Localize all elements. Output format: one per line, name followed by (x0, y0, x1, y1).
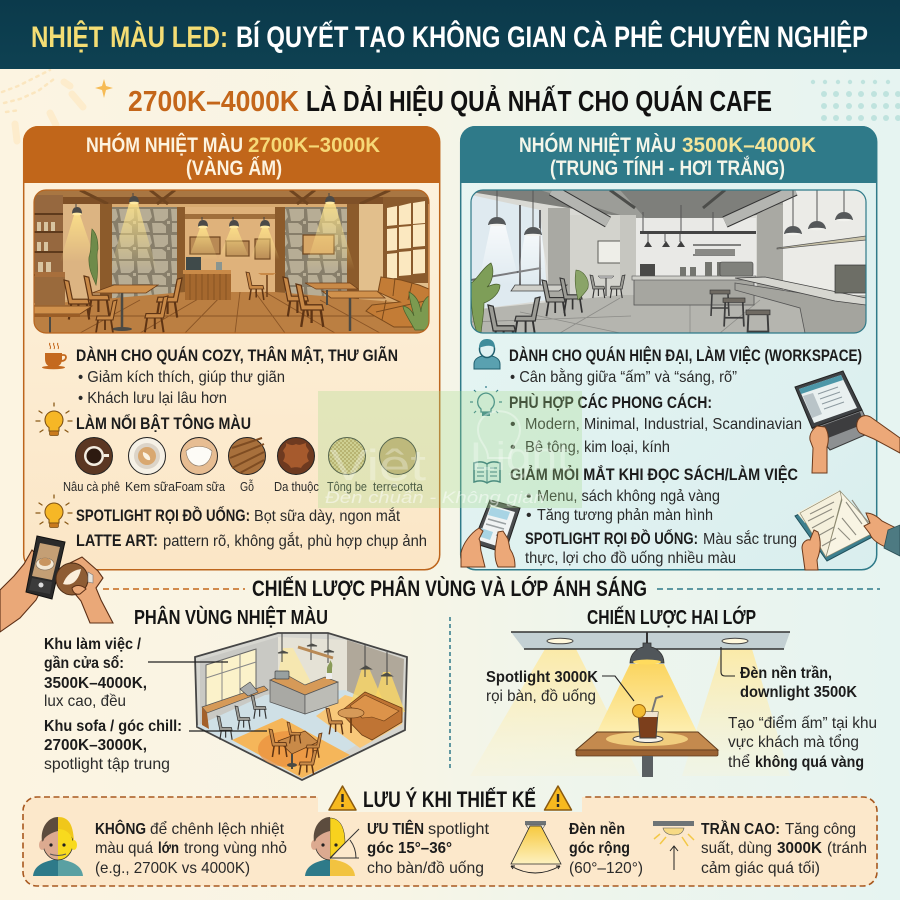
icon: light bulb (36, 495, 72, 528)
swatch: terracotta (380, 438, 416, 474)
block: spotlight and latte art: pattern rõ, không gắt, phù hợp chụp ảnh (163, 531, 427, 550)
icon: open book (474, 462, 500, 483)
text: warm point note: Tạo “điểm ấm” tại khu (728, 714, 877, 732)
block: reading and working: GIẢM MỎI MẮT KHI ĐỌC SÁCH/LÀM VIỆC (510, 465, 798, 484)
block: styles: • (510, 416, 516, 433)
text: sofa zone: spotlight tập trung (44, 756, 170, 773)
watermark: brand overlay: Việt (330, 441, 426, 490)
section heading: CHIẾN LƯỢC PHÂN VÙNG VÀ LỚP ÁNH SÁNG (252, 576, 647, 601)
main heading: 2700K–4000K (128, 86, 299, 118)
main heading: LÀ DẢI HIỆU QUẢ NHẤT CHO QUÁN CAFE (306, 84, 772, 118)
text: downlight: downlight 3500K (740, 684, 857, 701)
illustration: hands holding open book (795, 491, 900, 570)
block: color tones: LÀM NỔI BẬT TÔNG MÀU (76, 414, 251, 433)
text: no large difference: để chênh lệch nhiệt (150, 820, 285, 838)
illustration: isometric room (195, 633, 407, 780)
text: high ceiling: TRẦN CAO: (701, 819, 780, 838)
subheading: two layers: CHIẾN LƯỢC HAI LỚP (587, 605, 756, 629)
text: warm point note: thể (728, 753, 750, 771)
panel header neutral: (TRUNG TÍNH - HƠI TRẮNG) (550, 156, 785, 180)
text: high ceiling: suất, dùng (701, 840, 772, 857)
panel header warm (23, 126, 440, 183)
panel header neutral: 3500K–4000K (682, 134, 816, 157)
block: spotlight and latte art (36, 495, 427, 550)
text: wide angle light: Đèn nền (569, 821, 625, 838)
decoration: warm light rays top left (2, 70, 113, 141)
block: spotlight and latte art: SPOTLIGHT RỌI ĐỒ UỐNG: (76, 505, 250, 525)
block: spotlight and latte art: Bọt sữa dày, ngon mắt (254, 506, 400, 525)
text: no large difference (95, 819, 287, 877)
title banner (0, 0, 900, 69)
text: prefer spotlight: ƯU TIÊN (367, 819, 424, 838)
block: styles: • (510, 439, 516, 456)
panel header warm: 2700K–3000K (248, 134, 380, 157)
block: styles: Bê tông, kim loại, kính (525, 439, 670, 456)
text: spotlight: rọi bàn, đồ uống (486, 688, 596, 705)
text: sofa zone: Khu sofa / góc chill: (44, 718, 182, 735)
block: styles: Modern, Minimal, Industrial, Scandinavian (525, 416, 802, 433)
swatch labels: terrecotta (373, 479, 424, 494)
swatch: wood (228, 438, 266, 474)
block: reading and working: Menu, sách không ngả vàng (537, 488, 720, 505)
watermark: brand overlay (318, 391, 582, 508)
main heading (128, 84, 772, 118)
text: prefer spotlight: spotlight (428, 821, 490, 838)
text: work zone: gần cửa sổ: (44, 654, 124, 672)
watermark: brand overlay: Đèn chuẩn - Không gian (325, 488, 545, 507)
block: reading and working: Tăng tương phản màn hình (537, 507, 713, 524)
icon: warning right (544, 786, 572, 810)
illustration: cozy warm cafe interior (34, 190, 429, 333)
block: reading and working: • (526, 488, 532, 505)
left hand and arm (0, 550, 39, 632)
block: cozy cafe use: • Giảm kích thích, giúp thư giãn (78, 369, 285, 386)
panel: neutral 3500K-4000K (460, 126, 877, 570)
watermark: brand overlay: Light (470, 435, 570, 479)
text: spotlight (486, 669, 598, 705)
text: spotlight: Spotlight 3000K (486, 669, 598, 686)
panel: two layer strategy (470, 605, 877, 777)
swatch: beige (328, 438, 366, 474)
icon: high ceiling light (653, 821, 694, 870)
text: sofa zone: 2700K–3000K, (44, 737, 147, 754)
swatch labels: Nâu cà phê (63, 479, 120, 494)
block: spotlight on drinks: SPOTLIGHT RỌI ĐỒ UỐNG: (525, 528, 698, 548)
panel header neutral: NHÓM NHIỆT MÀU (519, 133, 676, 157)
swatch: leather (278, 438, 314, 474)
text: downlight: Đèn nền trần, (740, 665, 832, 682)
text: no large difference: trong vùng nhỏ (184, 840, 287, 857)
text: warm point note (728, 714, 877, 771)
text: downlight (740, 665, 857, 701)
swatch labels: Tông be (327, 479, 367, 494)
icon: person (474, 339, 500, 369)
panel: warm 2700K-3000K (23, 126, 440, 570)
block: cozy cafe use (42, 343, 398, 407)
leader line: downlight (721, 647, 735, 676)
decoration: teal dot grid top right (811, 80, 900, 121)
icon: face with spotlight angle (305, 817, 359, 876)
block: color tones (36, 403, 424, 494)
swatch: milk cream (128, 438, 166, 474)
leader lines (148, 662, 267, 731)
text: prefer spotlight: cho bàn/đồ uống (367, 860, 484, 877)
text: warm point note: không quá vàng (755, 754, 864, 771)
title text: NHIỆT MÀU LED: (31, 20, 228, 54)
swatch labels (63, 479, 424, 494)
block: spotlight and latte art: LATTE ART: (76, 531, 158, 550)
panel header warm: (VÀNG ẤM) (186, 157, 282, 180)
swatch: milk foam (180, 438, 218, 474)
block: cozy cafe use: DÀNH CHO QUÁN COZY, THÂN MẬT, THƯ GIÃN (76, 345, 398, 365)
block: spotlight on drinks: thực, lợi cho đồ uống nhiều màu (525, 550, 736, 567)
panel: design notes (23, 786, 877, 886)
text: high ceiling: (tránh (827, 840, 867, 857)
panel: color zoning (44, 605, 407, 780)
block: spotlight on drinks: Màu sắc trung (703, 529, 797, 548)
illustration: modern industrial cafe interior (471, 190, 866, 348)
text: work zone (44, 636, 147, 710)
block: styles (470, 386, 802, 456)
block: reading and working: • (526, 507, 532, 524)
leader line: spotlight (602, 676, 634, 701)
icon: outline bulb (470, 386, 502, 416)
text: prefer spotlight (367, 819, 490, 877)
swatch: coffee brown (76, 438, 112, 474)
subheading: zoning: PHÂN VÙNG NHIỆT MÀU (134, 605, 328, 629)
text: work zone: lux cao, đều (44, 693, 126, 710)
text: wide angle light: góc rộng (569, 840, 630, 857)
text: no large difference: lớn (158, 840, 179, 857)
panel header neutral (460, 126, 877, 183)
text: wide angle light (569, 821, 643, 877)
right hand and arm (70, 557, 113, 623)
heading: design notes: LƯU Ý KHI THIẾT KẾ (363, 787, 536, 812)
text: high ceiling: 3000K (777, 840, 822, 857)
swatch labels: Kem sữa (125, 479, 176, 494)
text: warm point note: vực khách mà tổng (728, 733, 859, 751)
block: styles: PHÙ HỢP CÁC PHONG CÁCH: (509, 393, 712, 412)
icon: warning left (329, 786, 356, 810)
swatch labels: Foam sữa (175, 479, 226, 494)
panel header warm: NHÓM NHIỆT MÀU (86, 133, 243, 157)
icon: coffee cup (42, 343, 66, 369)
divider (449, 617, 451, 770)
swatch labels: Gỗ (240, 479, 254, 494)
icon: wide angle downlight (511, 821, 561, 873)
text: work zone: 3500K–4000K, (44, 675, 147, 692)
block: spotlight on drinks (525, 528, 797, 567)
text: high ceiling: Tăng công (785, 821, 856, 838)
text: high ceiling (701, 819, 867, 877)
text: no large difference: (e.g., 2700K vs 4000K) (95, 860, 250, 877)
illustration: hands holding tablet (461, 500, 520, 567)
illustration: hands typing on laptop (795, 371, 900, 473)
illustration: hands holding phone photographing latte (0, 536, 113, 632)
text: prefer spotlight: góc 15°–36° (367, 840, 452, 857)
text: no large difference: màu quá (95, 840, 153, 857)
text: wide angle light: (60°–120°) (569, 860, 643, 877)
block: modern workspace use (474, 339, 862, 386)
block: reading and working (474, 462, 798, 524)
block: modern workspace use: • Cân bằng giữa “ấm” và “sáng, rõ” (510, 367, 737, 386)
swatch labels: Da thuộc (274, 479, 319, 494)
block: cozy cafe use: • Khách lưu lại lâu hơn (78, 390, 227, 407)
icon: light bulb (36, 403, 72, 436)
text: sofa zone (44, 718, 182, 773)
ducts (552, 190, 608, 222)
text: high ceiling: cảm giác quá tối) (701, 860, 820, 877)
icon: half warm face (33, 817, 83, 876)
illustration: ceiling, lamps and table (470, 632, 790, 777)
text: work zone: Khu làm việc / (44, 636, 142, 653)
text: no large difference: KHÔNG (95, 819, 146, 838)
